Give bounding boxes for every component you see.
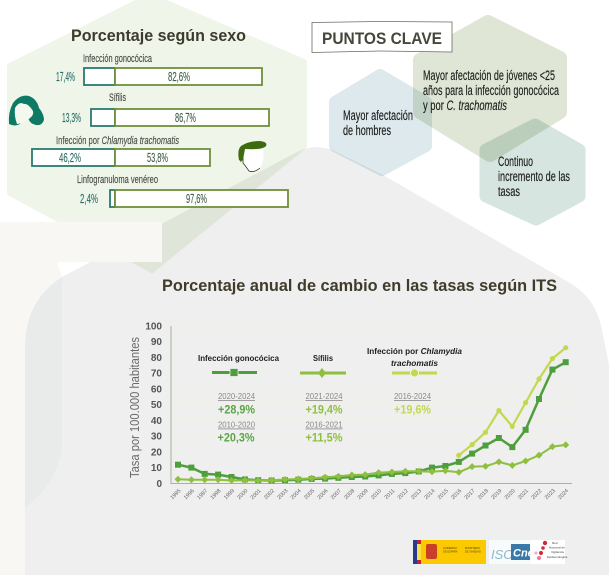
legend: infección gonocócica: 2010-2020 bbox=[218, 420, 256, 430]
legend: chlamydia: trachomatis bbox=[391, 358, 438, 368]
bar: chlamydia: 46,2% bbox=[59, 151, 81, 165]
text: incremento: tasas bbox=[498, 184, 520, 199]
text: incremento bbox=[498, 154, 570, 199]
bar: linfogranuloma venéreo: 97,6% bbox=[186, 192, 207, 206]
section: porcentaje según sexo bbox=[9, 26, 288, 207]
bar: sífilis: Sífilis bbox=[109, 92, 126, 104]
axis title: Tasa por 100.000 habitantes bbox=[128, 337, 142, 478]
icon: hombre bbox=[238, 141, 266, 172]
legend: infección gonocócica: +28,9% bbox=[218, 402, 255, 416]
panel: porcentaje según sexo background bbox=[10, 0, 304, 270]
x axis labels: 2022 bbox=[531, 488, 543, 501]
line: gonocócica bbox=[178, 362, 566, 480]
logo: gobierno de España: DE SANIDAD bbox=[465, 550, 481, 554]
bar: linfogranuloma venéreo: Linfogranuloma venéreo bbox=[77, 174, 158, 186]
x axis labels: 2012 bbox=[397, 488, 410, 501]
x axis labels: 2020 bbox=[504, 488, 517, 501]
x axis labels: 2015 bbox=[437, 488, 450, 501]
x axis labels: 2002 bbox=[263, 488, 276, 501]
legend: sífilis: +19,4% bbox=[306, 402, 343, 416]
text: hombres: de hombres bbox=[343, 123, 391, 138]
legend: chlamydia: 2016-2024 bbox=[394, 392, 432, 401]
logo: red nacional de vigilancia epidemiológica: Nacional de bbox=[549, 546, 565, 550]
legend: chlamydia: +19,6% bbox=[394, 402, 431, 416]
y axis labels bbox=[145, 322, 162, 490]
text: jóvenes bbox=[423, 68, 559, 113]
icon: mujer bbox=[9, 96, 44, 126]
y axis labels: 50 bbox=[151, 400, 162, 411]
legend: sífilis bbox=[300, 353, 346, 444]
y axis labels: 20 bbox=[151, 448, 162, 458]
y axis labels: 10 bbox=[151, 463, 162, 474]
x axis labels: 2023 bbox=[544, 488, 557, 501]
legend: sífilis: Sífilis bbox=[313, 353, 333, 363]
x axis labels: 2018 bbox=[477, 488, 490, 501]
legend: infección gonocócica: 2020-2024 bbox=[218, 392, 256, 401]
y axis labels: 80 bbox=[151, 353, 162, 364]
x axis labels: 2008 bbox=[343, 488, 356, 501]
x axis labels: 2007 bbox=[330, 488, 343, 501]
legend: chlamydia: Infección por Chlamydia bbox=[367, 346, 462, 356]
text: incremento: incremento de las bbox=[498, 169, 570, 184]
panel: off-white band bbox=[0, 222, 162, 575]
logo: red nacional de vigilancia epidemiológica: Epidemiológica bbox=[547, 555, 568, 559]
bar: chlamydia bbox=[32, 135, 210, 166]
line: chlamydia bbox=[459, 348, 566, 455]
x axis labels: 1996 bbox=[183, 488, 196, 501]
logo: red nacional de vigilancia epidemiológica bbox=[531, 540, 568, 564]
chart: tasa por 100.000 habitantes bbox=[128, 322, 572, 501]
x axis labels: 2016 bbox=[450, 488, 463, 501]
logo: gobierno de España: MINISTERIO bbox=[465, 546, 480, 550]
bar: sífilis: 86,7% bbox=[175, 111, 196, 125]
y axis labels: 40 bbox=[151, 416, 162, 427]
legend: infección gonocócica: +20,3% bbox=[218, 430, 255, 444]
line: sífilis bbox=[178, 445, 566, 480]
heading: porcentaje según sexo: Porcentaje según sexo bbox=[71, 26, 246, 45]
x axis labels: 1995 bbox=[170, 488, 182, 501]
x axis labels: 2003 bbox=[277, 488, 289, 501]
bar: chlamydia: 53,8% bbox=[147, 151, 168, 165]
x axis labels: 2013 bbox=[410, 488, 423, 501]
logo: gobierno de España: DE ESPAÑA bbox=[443, 548, 458, 554]
y axis labels: 100 bbox=[145, 322, 162, 332]
bar: linfogranuloma venéreo: 2,4% bbox=[80, 192, 98, 206]
bar: sífilis: 13,3% bbox=[62, 111, 81, 125]
x axis labels: 2005 bbox=[303, 488, 316, 501]
text: hombres bbox=[343, 108, 413, 138]
logos bbox=[413, 540, 568, 564]
bar: chlamydia: Infección por Chlamydia trachomatis bbox=[56, 135, 179, 147]
y axis labels: 0 bbox=[156, 479, 162, 490]
text: incremento: Continuo bbox=[498, 154, 533, 169]
panel: gráfico background bbox=[25, 147, 609, 575]
grid lines bbox=[171, 326, 572, 468]
x axis labels bbox=[170, 488, 570, 501]
hexagon: incremento bbox=[486, 125, 579, 219]
x axis labels: 2019 bbox=[490, 488, 503, 501]
logo: red nacional de vigilancia epidemiológica: Red bbox=[552, 541, 558, 545]
text: hombres: Mayor afectación bbox=[343, 108, 413, 123]
text: jóvenes: y por C. trachomatis bbox=[423, 98, 507, 113]
legend: sífilis: +11,5% bbox=[306, 430, 343, 444]
x axis labels: 2017 bbox=[464, 488, 477, 501]
logo: Cne bbox=[489, 540, 534, 564]
logo: Cne: Cne bbox=[513, 548, 534, 560]
legend: infección gonocócica bbox=[198, 353, 279, 444]
bar: infección gonocócica: 82,6% bbox=[168, 70, 190, 84]
x axis labels: 1999 bbox=[223, 488, 236, 501]
bar: infección gonocócica: 17,4% bbox=[56, 70, 75, 84]
section: puntos clave bbox=[312, 22, 570, 199]
y axis labels: 30 bbox=[151, 432, 162, 442]
y axis labels: 70 bbox=[151, 368, 162, 380]
logo: gobierno de España bbox=[413, 540, 486, 564]
panel: left shade bbox=[25, 277, 62, 508]
legend: chlamydia bbox=[367, 346, 462, 416]
x axis labels: 2006 bbox=[317, 488, 330, 501]
x axis labels: 2001 bbox=[250, 488, 263, 501]
heading: puntos clave bbox=[312, 22, 452, 52]
x axis labels: 2014 bbox=[424, 488, 436, 501]
x axis labels: 2004 bbox=[290, 488, 303, 501]
bar: infección gonocócica bbox=[56, 53, 262, 85]
legend: infección gonocócica: Infección gonocócica bbox=[198, 353, 279, 363]
legend: sífilis: 2016-2021 bbox=[306, 420, 343, 430]
bar: sífilis bbox=[62, 92, 269, 126]
x axis labels: 2000 bbox=[236, 488, 249, 501]
heading: porcentaje anual: Porcentaje anual de cambio en las tasas según ITS bbox=[162, 277, 557, 295]
y axis labels: 90 bbox=[151, 337, 162, 348]
x axis labels: 2024 bbox=[557, 488, 570, 501]
y axis labels: 60 bbox=[151, 384, 162, 396]
x axis labels: 2011 bbox=[384, 488, 396, 501]
logo: red nacional de vigilancia epidemiológica: Vigilancia bbox=[551, 550, 564, 554]
x axis labels: 2021 bbox=[517, 488, 530, 501]
x axis labels: 1998 bbox=[210, 488, 223, 501]
axes bbox=[171, 326, 572, 484]
x axis labels: 2010 bbox=[370, 488, 383, 501]
bar: infección gonocócica: Infección gonocócica bbox=[83, 53, 153, 65]
logo: gobierno de España: GOBIERNO bbox=[443, 546, 457, 550]
x axis labels: 2009 bbox=[357, 488, 370, 501]
legend: sífilis: 2021-2024 bbox=[306, 392, 343, 401]
logo: Cne: ISC bbox=[491, 547, 513, 562]
bar: linfogranuloma venéreo bbox=[77, 174, 288, 207]
heading: puntos clave: PUNTOS CLAVE bbox=[322, 29, 442, 48]
hexagon: jóvenes bbox=[420, 22, 560, 155]
hexagon: hombres bbox=[335, 75, 426, 170]
x axis labels: 1997 bbox=[196, 488, 209, 501]
